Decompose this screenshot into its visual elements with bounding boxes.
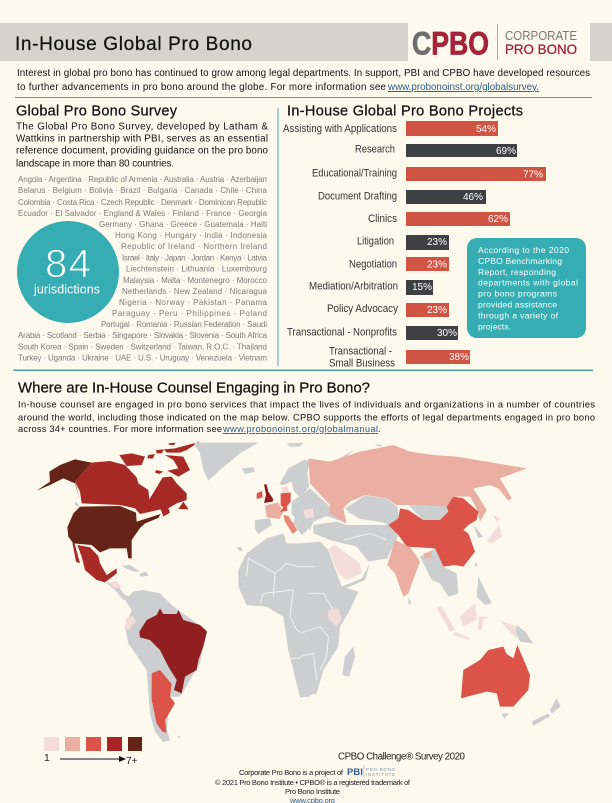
alaska bbox=[37, 459, 92, 500]
romania bbox=[303, 508, 314, 518]
jurisdiction list: Belarus · Belgium · Bolivia · Brazil · Bulgaria · Canada · Chile · China bbox=[18, 186, 268, 195]
bar: transactional small business 38%: Transactional - bbox=[329, 346, 392, 358]
survey description bbox=[16, 122, 269, 170]
survey description: reference document, providing guidance on the pro bono bbox=[16, 146, 269, 156]
germany bbox=[280, 493, 291, 512]
brazil bbox=[139, 608, 207, 693]
bar: assisting with applications 54%: Assisting with Applications bbox=[283, 123, 397, 135]
bar: policy advocacy 23%: 23% bbox=[427, 305, 447, 316]
bar: transactional nonprofits 30% bbox=[287, 326, 458, 340]
middle east and central asia base bbox=[313, 444, 399, 562]
footer credits bbox=[215, 765, 411, 803]
bar: mediation/arbitration 15%: Mediation/Arbitration bbox=[309, 280, 398, 292]
jurisdiction list: Malaysia · Malta · Montenegro · Morocco bbox=[123, 276, 268, 285]
callout: benchmarking report: According to the 2020 bbox=[478, 245, 569, 255]
argentina bbox=[152, 670, 175, 733]
bar: mediation/arbitration 15% bbox=[309, 280, 433, 295]
heading: global pro bono survey: Global Pro Bono Survey bbox=[16, 104, 178, 120]
jurisdiction list: Hong Kong · Hungary · India · Indonesia bbox=[115, 231, 268, 240]
bar: policy advocacy 23% bbox=[327, 303, 449, 317]
bar: educational/training 77% bbox=[312, 167, 546, 181]
south east asia bbox=[420, 548, 458, 597]
map: europe bbox=[255, 459, 347, 535]
callout: benchmarking report: Report, responding bbox=[478, 267, 556, 277]
bar: document drafting 46%: 46% bbox=[463, 192, 483, 203]
callout: benchmarking report: provided assistance bbox=[478, 300, 557, 310]
spain and portugal bbox=[255, 518, 272, 534]
france bbox=[265, 502, 283, 519]
africa west bbox=[238, 533, 310, 697]
jurisdiction list: Nigeria · Norway · Pakistan · Panama bbox=[119, 298, 268, 307]
china bbox=[388, 497, 478, 567]
falkland islands bbox=[178, 736, 180, 738]
vancouver island bbox=[75, 502, 79, 507]
greenland and iceland bbox=[193, 443, 303, 481]
source: cpbo challenge survey: CPBO Challenge® Survey 2020 bbox=[338, 752, 466, 762]
canada bbox=[75, 442, 200, 517]
tasmania bbox=[502, 713, 509, 719]
footer credits: Pro Bono Institute bbox=[285, 787, 340, 796]
callout: benchmarking report: pro bono programs bbox=[478, 288, 557, 298]
map description: In-house counsel are engaged in pro bono services that impact the lives of individuals and organizations in a number of countries bbox=[18, 400, 595, 410]
callout: 84 jurisdictions: 84 bbox=[45, 242, 91, 286]
intro text: www.probonoinst.org/globalsurvey. bbox=[387, 82, 539, 93]
jurisdiction list: Arabia · Scotland · Serbia · Singapore · Slovakia · Slovenia · South Africa bbox=[18, 331, 268, 340]
callout: 84 jurisdictions bbox=[17, 221, 119, 323]
map description: . bbox=[378, 424, 381, 434]
jurisdiction list: Netherlands · New Zealand · Nicaragua bbox=[122, 287, 268, 296]
jurisdiction list: South Korea · Spain · Sweden · Switzerland · Taiwan, R.O.C. · Thailand bbox=[18, 342, 267, 352]
callout: benchmarking report bbox=[467, 238, 586, 338]
jurisdiction list: Colombia · Costa Rica · Czech Republic · Denmark · Dominican Republic bbox=[18, 198, 267, 207]
header band bbox=[0, 23, 612, 62]
map: latin america bbox=[72, 443, 310, 742]
new zealand bbox=[532, 698, 561, 726]
bar: negotiation 23%: Negotiation bbox=[349, 258, 397, 270]
panel: in-house global pro bono projects bbox=[283, 104, 586, 370]
jurisdiction list: Angola · Argentina · Republic of Armenia · Australia · Austria · Azerbaijan bbox=[18, 175, 267, 184]
russia bbox=[308, 445, 527, 523]
map legend: 7+ bbox=[126, 756, 138, 767]
korea bbox=[473, 525, 483, 538]
panel: global pro bono survey bbox=[16, 104, 269, 362]
bar: negotiation 23%: 23% bbox=[427, 260, 447, 270]
bar: research 69%: 69% bbox=[496, 146, 516, 157]
mexico bbox=[72, 543, 117, 582]
balkans bbox=[293, 516, 308, 535]
callout: benchmarking report: through a variety of bbox=[478, 310, 559, 320]
callout: 84 jurisdictions: jurisdictions bbox=[33, 282, 100, 296]
survey description: landscape in more than 80 countries. bbox=[16, 158, 174, 170]
bar: assisting with applications 54% bbox=[283, 121, 498, 136]
madagascar bbox=[342, 647, 355, 677]
united states bbox=[67, 506, 163, 558]
intro text: Interest in global pro bono has continued to grow among legal departments. In support, PBI and CPBO have developed resources bbox=[17, 68, 590, 79]
italy bbox=[283, 515, 297, 534]
bar: clinics 62% bbox=[368, 212, 510, 226]
ecuador bbox=[125, 616, 136, 630]
world map bbox=[37, 442, 561, 742]
bar: transactional nonprofits 30%: Transactional - Nonprofits bbox=[287, 326, 397, 338]
survey description: Wattkins in partnership with PBI, serves as an essential bbox=[16, 134, 268, 144]
yemen and oman bbox=[342, 563, 370, 589]
jurisdiction list: Israel · Italy · Japan · Jordan · Kenya · Latvia bbox=[122, 254, 268, 262]
intro text bbox=[17, 68, 590, 93]
jurisdiction list: Ecuador · El Salvador · England & Wales · Finland · France · Georgia bbox=[18, 209, 268, 218]
map: north america bbox=[37, 442, 200, 558]
bar: negotiation 23% bbox=[349, 257, 449, 271]
japan bbox=[487, 515, 502, 543]
logo: pro bono institute: PBI bbox=[347, 767, 363, 778]
jurisdiction list: Turkey · Uganda · Ukraine · UAE · U.S. · Uruguay · Venezuela · Vietnam bbox=[18, 354, 267, 362]
mongolia bbox=[408, 505, 448, 520]
africa east bbox=[300, 542, 358, 698]
map legend bbox=[44, 737, 142, 767]
scandinavia bbox=[279, 459, 310, 497]
heading: projects: In-House Global Pro Bono Projects bbox=[287, 104, 523, 120]
footer credits: © 2021 Pro Bono Institute • CPBO® is a registered trademark of bbox=[215, 778, 411, 787]
map description: around the world, including those indicated on the map below. CPBO supports the efforts of legal departments engaged in pro bono bbox=[18, 412, 595, 422]
central america and caribbean bbox=[106, 547, 243, 600]
ireland bbox=[257, 491, 263, 499]
callout: benchmarking report: CPBO Benchmarking bbox=[478, 256, 562, 266]
logo: CPBO Corporate Pro Bono: CORPORATE bbox=[505, 29, 577, 43]
map: eurasia, africa east and oceania bbox=[300, 444, 561, 726]
kenya bbox=[328, 608, 342, 627]
bar: assisting with applications 54%: 54% bbox=[476, 124, 496, 135]
south america base bbox=[125, 590, 207, 742]
map description: www.probonoinst.org/globalmanual bbox=[222, 424, 378, 434]
saudi arabia bbox=[328, 545, 362, 580]
bar: research 69%: Research bbox=[355, 144, 395, 156]
survey description: The Global Pro Bono Survey, developed by Latham & bbox=[16, 122, 268, 132]
jurisdiction list: Paraguay · Peru · Philippines · Poland bbox=[112, 309, 267, 318]
map description bbox=[18, 400, 595, 434]
papua new guinea bbox=[516, 625, 533, 643]
denmark bbox=[282, 487, 289, 493]
bar: litigation 23%: Litigation bbox=[357, 236, 394, 248]
australia bbox=[461, 645, 530, 707]
bar: transactional small business 38%: 38% bbox=[449, 352, 469, 363]
bar: policy advocacy 23%: Policy Advocacy bbox=[327, 303, 398, 315]
intro text: to further advancements in pro bono around the globe. For more information see bbox=[17, 82, 387, 93]
jurisdiction list: Liechtenstein · Lithuania · Luxembourg bbox=[126, 264, 267, 274]
map description: across 34+ countries. For more information see bbox=[18, 424, 222, 434]
bar: educational/training 77%: Educational/Training bbox=[312, 168, 397, 180]
logo: CPBO Corporate Pro Bono bbox=[408, 23, 590, 62]
jurisdiction list: Portugal · Romania · Russian Federation · Saudi bbox=[101, 320, 267, 329]
map legend: 1 bbox=[44, 752, 50, 764]
bar: litigation 23% bbox=[357, 235, 449, 250]
logo: pro bono institute: INSTITUTE bbox=[366, 772, 395, 777]
bar: clinics 62%: 62% bbox=[488, 214, 508, 225]
bar chart: project types bbox=[283, 121, 546, 370]
bar: clinics 62%: Clinics bbox=[368, 213, 397, 225]
taiwan bbox=[475, 562, 478, 567]
bar: educational/training 77%: 77% bbox=[523, 170, 543, 180]
bar: transactional nonprofits 30%: 30% bbox=[437, 328, 457, 339]
bar: transactional small business 38% bbox=[329, 346, 470, 370]
jurisdiction list: Republic of Ireland · Northern Ireland bbox=[121, 242, 267, 251]
heading: where are in-house counsel engaging: Where are In-House Counsel Engaging in Pro Bono? bbox=[18, 380, 370, 396]
bar: research 69% bbox=[355, 144, 517, 157]
callout: benchmarking report: departments with global bbox=[478, 278, 578, 288]
bar: litigation 23%: 23% bbox=[427, 237, 447, 248]
jurisdiction list bbox=[18, 175, 268, 362]
eastern europe bbox=[292, 488, 347, 530]
indonesia bbox=[436, 603, 517, 640]
logo: CPBO Corporate Pro Bono: PRO BONO bbox=[505, 41, 577, 57]
sri lanka bbox=[408, 598, 412, 604]
logo: pro bono institute: PRO BONO bbox=[366, 767, 396, 772]
united kingdom bbox=[264, 484, 273, 503]
callout: benchmarking report: projects. bbox=[478, 322, 511, 332]
bar: document drafting 46% bbox=[318, 190, 486, 204]
title: In-House Global Pro Bono bbox=[15, 34, 252, 55]
india bbox=[387, 540, 420, 597]
bar: transactional small business 38%: Small Business bbox=[329, 358, 395, 370]
bar: mediation/arbitration 15%: 15% bbox=[412, 282, 432, 293]
jurisdiction list: Germany · Ghana · Greece · Guatemala · Haiti bbox=[99, 220, 267, 229]
logo: CPBO Corporate Pro Bono: CPBO bbox=[412, 26, 489, 62]
philippines bbox=[477, 577, 492, 605]
bar: document drafting 46%: Document Drafting bbox=[318, 190, 397, 202]
logo: pro bono institute bbox=[347, 765, 396, 778]
footer credits: Corporate Pro Bono is a project of bbox=[239, 768, 344, 777]
